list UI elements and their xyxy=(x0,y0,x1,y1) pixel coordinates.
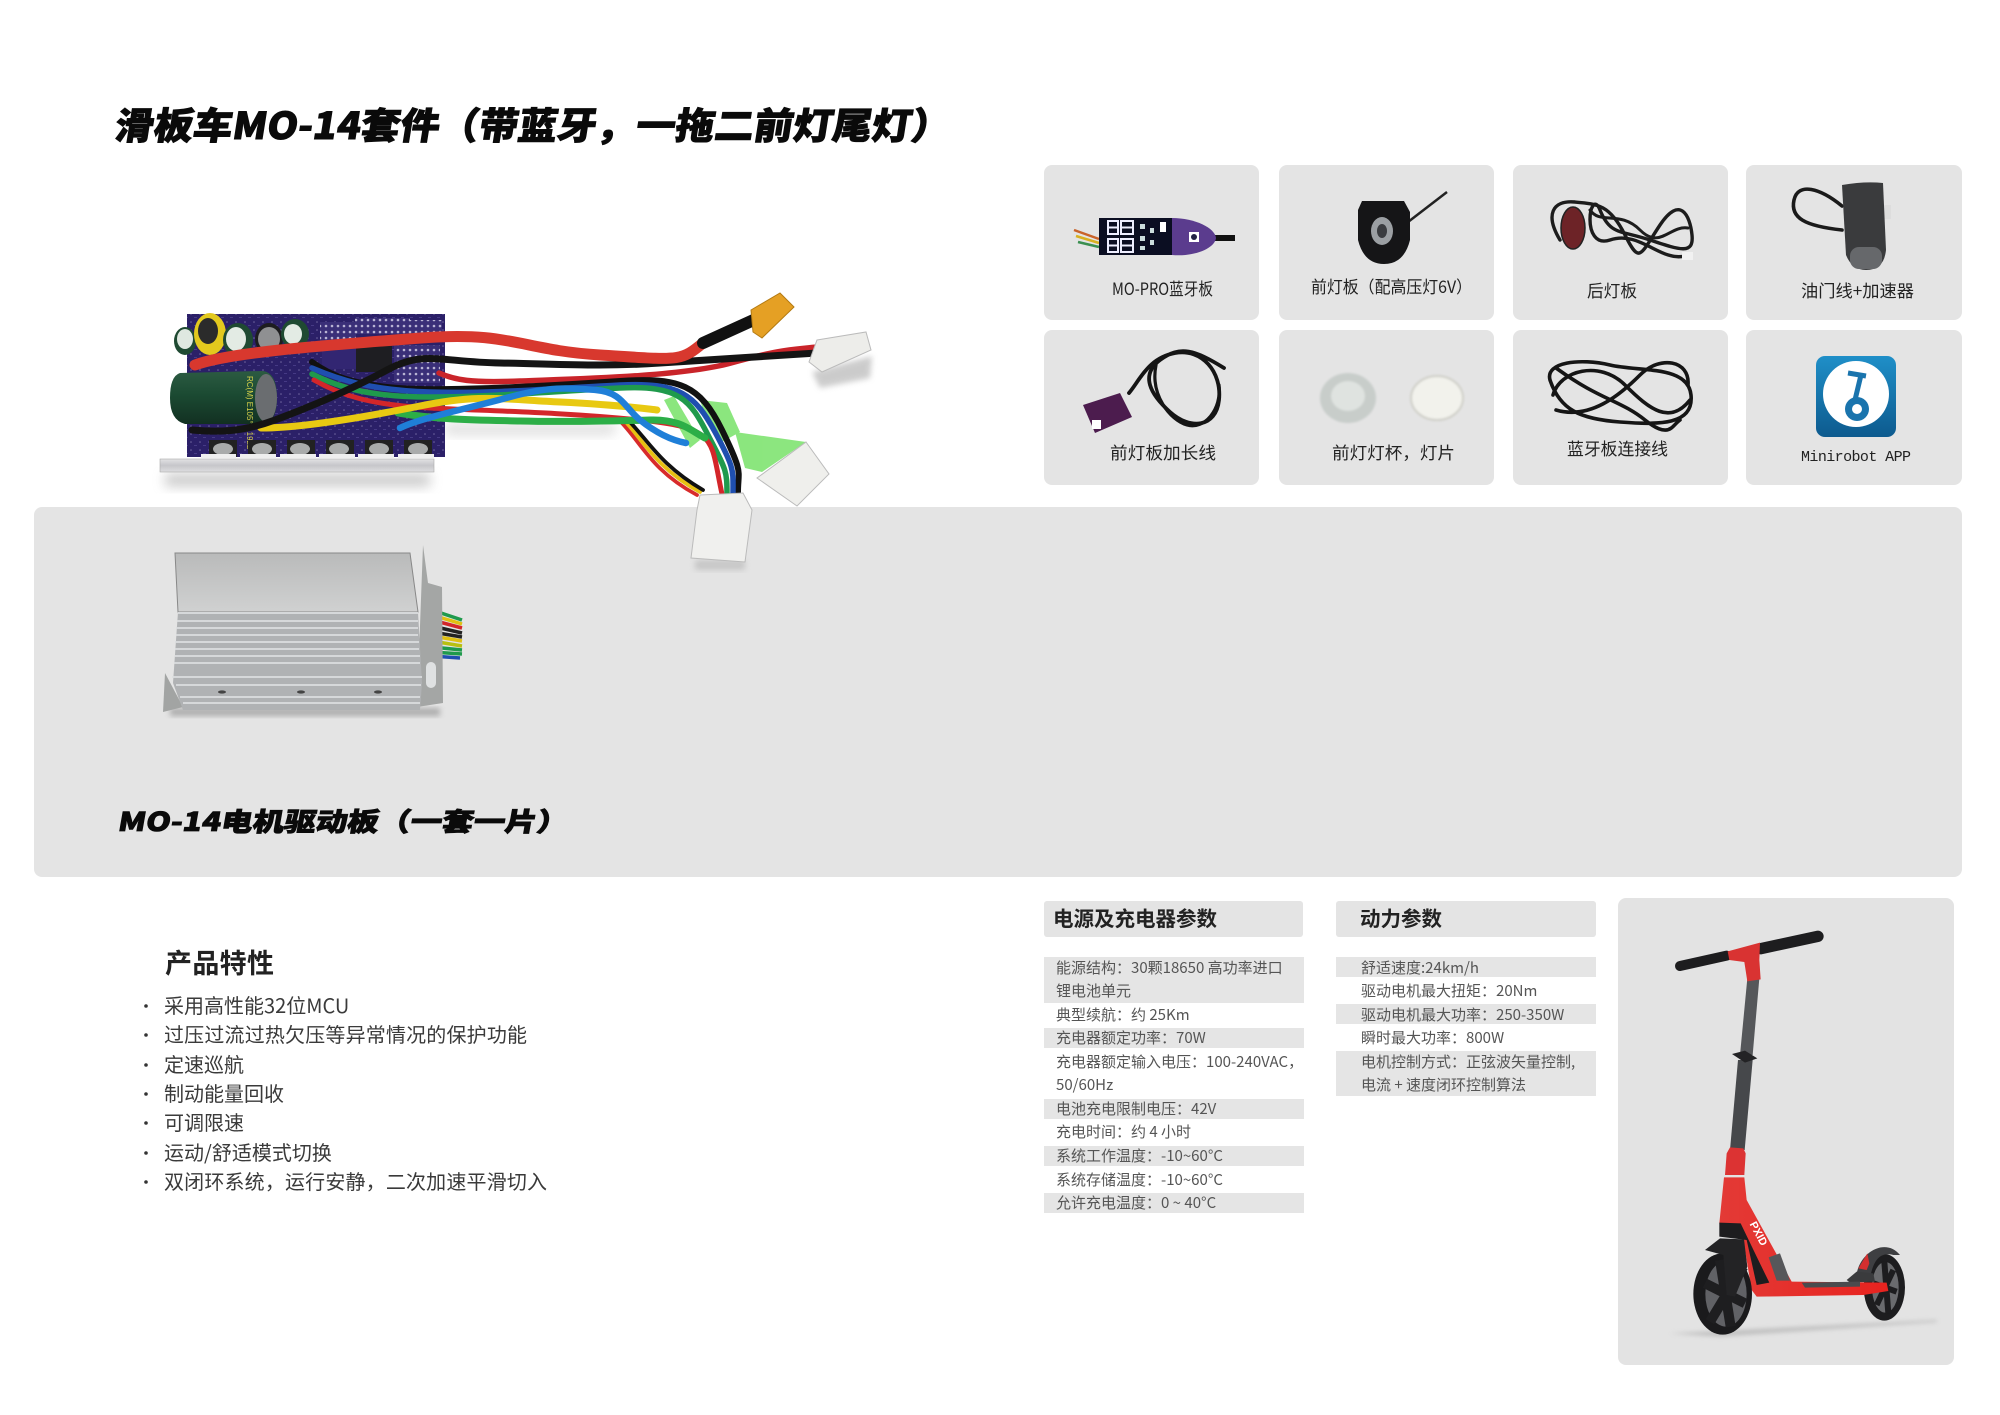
icon: throttle xyxy=(1793,182,1891,270)
chip xyxy=(356,346,392,372)
title: 滑板车MO-14套件（带蓝牙，一拖二前灯尾灯） xyxy=(111,96,956,150)
rear wheel and fender xyxy=(1847,1247,1905,1321)
box finned face xyxy=(173,612,422,710)
bullet list: 过压过流过热欠压等异常情况的保护功能 xyxy=(164,1019,527,1048)
rows: 舒适速度:24km/h xyxy=(1361,957,1479,978)
accessory card: Minirobot APP xyxy=(1746,330,1962,485)
product features xyxy=(144,942,547,1195)
brand label: PXID xyxy=(1747,1220,1769,1248)
ground shadow xyxy=(1670,1320,1937,1337)
accessory card: headlight cup and lens xyxy=(1279,330,1494,485)
wires from box xyxy=(432,610,462,658)
header: 动力参数 xyxy=(1360,902,1442,932)
white connector 2 xyxy=(757,442,829,506)
rows: 系统工作温度：-10~60°C xyxy=(1056,1145,1223,1166)
controller board photo with wires xyxy=(160,293,872,570)
label: Minirobot APP xyxy=(1801,449,1911,466)
rows: 电流 + 速度闭环控制算法 xyxy=(1361,1074,1526,1095)
thin wire group xyxy=(619,420,703,495)
large green capacitor xyxy=(170,371,277,450)
yellow power connector xyxy=(751,293,794,338)
header: 电源及充电器参数 xyxy=(1053,902,1217,932)
transistor row xyxy=(201,440,434,458)
small capacitors xyxy=(174,313,309,357)
icon: tail light with cable xyxy=(1552,202,1693,260)
box top face xyxy=(175,553,418,612)
bullet list: 定速巡航 xyxy=(164,1049,244,1078)
rows: 充电时间：约 4 小时 xyxy=(1056,1121,1191,1142)
spec table: power and charger xyxy=(1044,901,1304,1213)
panel: motor driver board background xyxy=(34,507,1962,877)
rows xyxy=(1056,957,1303,1213)
label: 蓝牙板连接线 xyxy=(1567,435,1668,460)
heading: 产品特性 xyxy=(165,942,274,981)
label: 前灯板（配高压灯6V） xyxy=(1311,273,1472,298)
aluminium driver box photo xyxy=(163,545,462,716)
label: 油门线+加速器 xyxy=(1801,277,1914,302)
wire bundle xyxy=(192,318,817,494)
bullet list: 可调限速 xyxy=(164,1107,244,1136)
rows: 驱动电机最大扭矩：20Nm xyxy=(1361,980,1537,1001)
rows: 电机控制方式：正弦波矢量控制, xyxy=(1361,1051,1575,1072)
icon: headlight xyxy=(1358,192,1447,264)
icon: coiled cable xyxy=(1550,362,1691,430)
accessory card: tail light board xyxy=(1513,165,1728,320)
board shadow xyxy=(165,474,430,486)
connector shadow xyxy=(812,356,872,388)
rows: 电池充电限制电压：42V xyxy=(1056,1098,1217,1119)
rows: 50/60Hz xyxy=(1056,1074,1113,1095)
board detail pads xyxy=(320,318,442,383)
front wheel xyxy=(1693,1238,1752,1335)
accessory card: throttle xyxy=(1746,165,1962,320)
rows: 瞬时最大功率：800W xyxy=(1361,1027,1504,1048)
driver board heading: MO-14电机驱动板（一套一片） xyxy=(116,801,572,839)
rows: 允许充电温度：0 ~ 40°C xyxy=(1056,1192,1217,1213)
box shadow xyxy=(170,708,440,716)
large green capacitor: RC(M) E105°C 1922 xyxy=(245,376,254,450)
screw holes xyxy=(218,690,382,694)
accessory card: headlight board xyxy=(1279,165,1494,320)
aluminium heat sink bar xyxy=(160,459,434,472)
wire shadow xyxy=(445,424,615,434)
accessory card: headlight board extension cable xyxy=(1044,330,1259,485)
header xyxy=(1336,901,1596,937)
rows: 充电器额定输入电压：100-240VAC， xyxy=(1056,1051,1303,1072)
row bands xyxy=(1044,957,1304,1213)
flange slot xyxy=(426,662,436,688)
white connector 3 xyxy=(691,493,752,562)
mounting flanges xyxy=(417,545,443,707)
stem xyxy=(1730,978,1759,1150)
bullet list: 双闭环系统，运行安静，二次加速平滑切入 xyxy=(164,1166,547,1195)
accessory card: MO-PRO Bluetooth board xyxy=(1044,165,1259,320)
icon: lens cup xyxy=(1320,373,1376,423)
white connector 1 xyxy=(809,332,871,372)
bullet list: 采用高性能32位MCU xyxy=(164,990,349,1019)
label: 前灯板加长线 xyxy=(1110,439,1216,464)
handlebar xyxy=(1680,936,1818,981)
bullet list: 运动/舒适模式切换 xyxy=(164,1137,332,1166)
icon: cable and small board xyxy=(1083,351,1224,433)
rows: 驱动电机最大功率：250-350W xyxy=(1361,1004,1564,1025)
spec table: drive parameters xyxy=(1336,901,1596,1096)
icon: lens plate xyxy=(1411,376,1463,420)
rows: 系统存储温度：-10~60°C xyxy=(1056,1169,1223,1190)
label: 前灯灯杯，灯片 xyxy=(1332,439,1455,464)
circuit board xyxy=(187,314,445,457)
rows: 充电器额定功率：70W xyxy=(1056,1027,1206,1048)
bullet list: 制动能量回收 xyxy=(164,1078,284,1107)
connector shadow xyxy=(695,560,745,570)
row bands xyxy=(1336,957,1596,1096)
bullet list xyxy=(144,990,547,1195)
panel: scooter card xyxy=(1618,898,1954,1365)
red frame and deck xyxy=(1719,1147,1888,1297)
rows: 能源结构：30颗18650 高功率进口 xyxy=(1056,957,1283,978)
icon: display board xyxy=(1074,218,1235,255)
rows: 典型续航：约 25Km xyxy=(1056,1004,1190,1025)
green heat-shrink sleeves xyxy=(664,396,806,472)
rows: 锂电池单元 xyxy=(1056,980,1131,1001)
accessory card: Bluetooth board cable xyxy=(1513,330,1728,485)
icon: app logo xyxy=(1816,356,1896,437)
rows xyxy=(1361,957,1575,1095)
header xyxy=(1044,901,1303,937)
label: 后灯板 xyxy=(1587,277,1637,302)
label: MO-PRO蓝牙板 xyxy=(1112,275,1213,300)
scooter illustration xyxy=(1670,936,1937,1337)
